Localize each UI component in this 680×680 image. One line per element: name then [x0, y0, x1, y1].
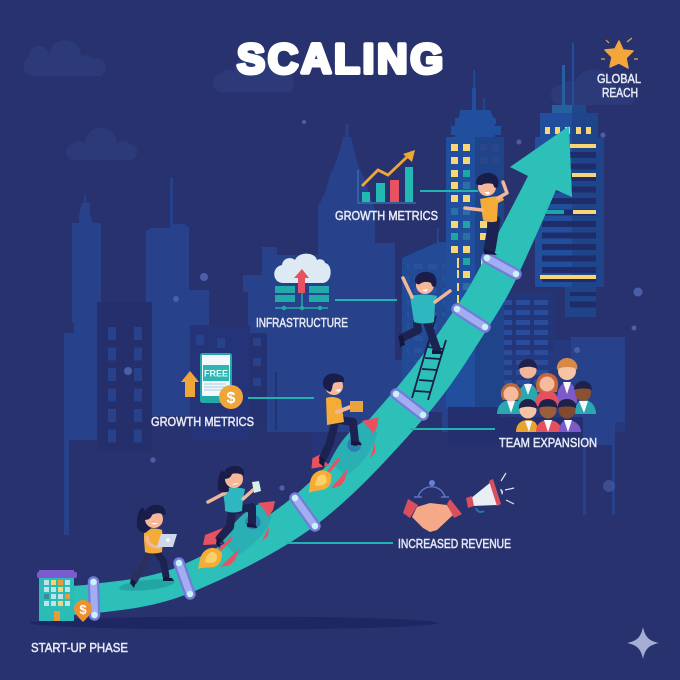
start-up building icon: $ [79, 602, 87, 617]
background clouds [23, 40, 634, 160]
growth arrow [72, 126, 572, 615]
start-up label: START-UP PHASE [31, 641, 128, 655]
person: girl with phone [208, 466, 261, 548]
ladder [412, 316, 446, 400]
city skyline: small stepped tower [402, 228, 446, 392]
rocket two [302, 417, 386, 493]
icon: megaphone [466, 473, 514, 512]
ground shadow [30, 616, 438, 630]
front fin [262, 526, 269, 541]
label: increased revenue: INCREASED REVENUE [398, 537, 511, 551]
left tall tower [146, 178, 209, 416]
flame [198, 548, 222, 569]
rocket one [198, 501, 275, 569]
city skyline: back silhouettes [64, 124, 625, 535]
label: growth metrics left: GROWTH METRICS [151, 415, 254, 429]
person: girl with laptop [130, 505, 177, 588]
centre block [243, 124, 395, 432]
far-left tower [64, 195, 101, 535]
upper fin [203, 528, 223, 545]
label: growth metrics top: GROWTH METRICS [335, 209, 438, 223]
icon: team group [497, 358, 596, 432]
mid-block dark buildings [190, 325, 250, 440]
icon: phone with coin: FREE [204, 368, 228, 378]
label: global reach [597, 72, 641, 100]
floating dots [124, 120, 642, 492]
label: global reach: REACH [602, 86, 638, 100]
location pin [74, 600, 92, 622]
connector lines [248, 191, 495, 543]
arrow segment clamps [90, 255, 519, 618]
person: man climbing top [465, 173, 507, 255]
person shadow on arrow [119, 577, 175, 593]
title: SCALING [237, 35, 443, 82]
person: man with box [319, 373, 363, 467]
city skyline: right tower with stripes [535, 43, 604, 317]
start-up building icon [37, 570, 92, 622]
icon: phone with coin: $ [227, 390, 236, 407]
lower fin [220, 549, 239, 567]
icon: cloud servers [274, 254, 331, 310]
label: infrastructure: INFRASTRUCTURE [256, 316, 348, 330]
fin stripe [214, 538, 232, 555]
label: team expansion: TEAM EXPANSION [499, 436, 597, 450]
person: man on ladder [399, 272, 450, 354]
label: global reach: GLOBAL [597, 72, 641, 86]
icon: star [601, 38, 638, 68]
icon: phone with coin [181, 353, 243, 409]
sparkle icon [627, 627, 659, 659]
dark windowed block [97, 302, 152, 452]
city skyline: centre tower with lit windows [446, 70, 504, 407]
icon: handshake [403, 480, 462, 532]
icon: growth chart [358, 150, 416, 203]
right lower buildings [495, 340, 625, 432]
